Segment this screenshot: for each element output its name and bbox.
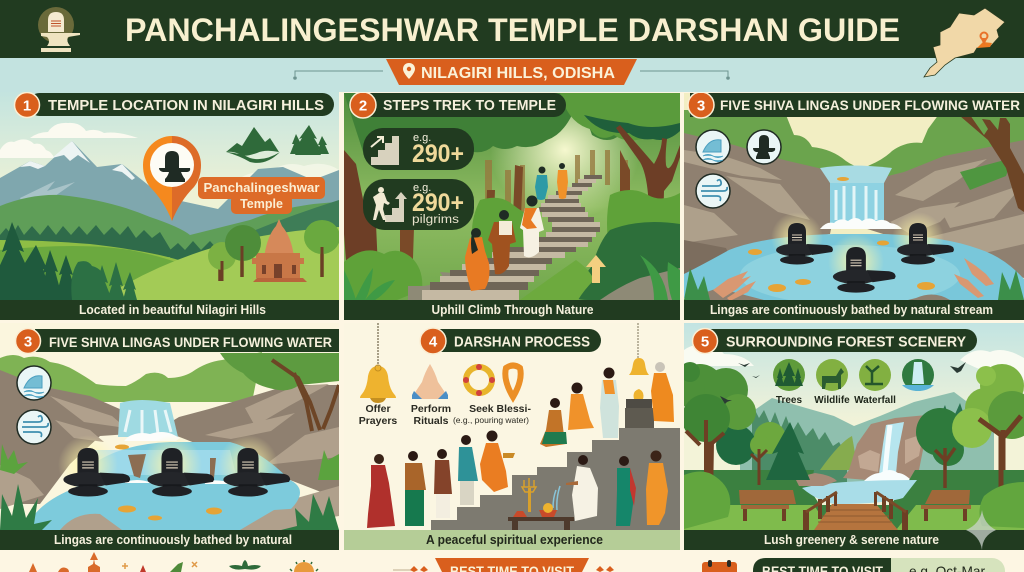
- hands: [713, 258, 994, 301]
- caption: [0, 530, 339, 550]
- heading: 3: [697, 98, 705, 114]
- caption: Lush greenery & serene nature: [764, 533, 939, 547]
- heading: FIVE SHIVA LINGAS UNDER FLOWING WATER: [49, 334, 332, 350]
- stat: steps: [363, 128, 474, 170]
- distant trunks: [485, 150, 628, 212]
- heading: FIVE SHIVA LINGAS UNDER FLOWING WATER: [720, 97, 1020, 113]
- heading: [350, 92, 566, 118]
- panel: five lingas bottom: [0, 323, 339, 550]
- caption: [344, 300, 680, 320]
- heading: TEMPLE LOCATION IN NILAGIRI HILLS: [48, 98, 324, 114]
- offering table: [508, 478, 574, 530]
- ground: [684, 470, 1024, 550]
- panel: darshan process: [344, 323, 680, 550]
- panel: forest scenery: [676, 323, 1024, 550]
- foliage: [0, 352, 262, 402]
- process labels: [359, 403, 531, 427]
- footer decorations: [29, 552, 413, 572]
- process labels: Perform: [411, 403, 451, 415]
- heading: [688, 92, 1024, 118]
- sparkle: [966, 510, 996, 550]
- mountains: [0, 141, 339, 235]
- heading: STEPS TREK TO TEMPLE: [383, 98, 556, 114]
- evergreen trees: [0, 222, 79, 300]
- process labels: Rituals: [413, 415, 449, 427]
- bushes: [344, 190, 680, 302]
- lingas: [58, 435, 290, 497]
- round trees: [218, 254, 324, 281]
- tree trunks: [344, 125, 680, 260]
- foliage: [684, 110, 1024, 176]
- benches: [739, 490, 971, 521]
- caption: Uphill Climb Through Nature: [432, 303, 594, 317]
- scenery labels: Waterfall: [854, 395, 896, 406]
- icons: [17, 366, 51, 444]
- process labels: Offer: [365, 403, 391, 415]
- grey rocks: [408, 268, 680, 300]
- panel: temple location: [0, 92, 340, 322]
- heading: 2: [359, 98, 367, 114]
- icons: [696, 130, 781, 208]
- pilgrims: [367, 362, 674, 528]
- meadow: [0, 240, 178, 262]
- process labels: Prayers: [359, 415, 397, 427]
- coins: [748, 249, 762, 255]
- best time pill: [753, 558, 1005, 572]
- header band: [0, 0, 1024, 92]
- caption: Lingas are continuously bathed by natural: [54, 533, 292, 547]
- heading: DARSHAN PROCESS: [454, 334, 590, 350]
- label: temple: Temple: [240, 197, 283, 211]
- panel: five lingas top: [684, 92, 1024, 320]
- caption: Located in beautiful Nilagiri Hills: [79, 303, 266, 317]
- process labels: (e.g., pouring water): [453, 415, 529, 425]
- heading: [420, 328, 601, 354]
- caption: [344, 530, 680, 550]
- best time banner: [410, 558, 614, 572]
- caption: [684, 530, 1024, 550]
- bird icons: [720, 362, 966, 404]
- water: [25, 442, 300, 530]
- stairs: [422, 175, 602, 300]
- heading: SURROUNDING FOREST SCENERY: [726, 334, 966, 350]
- pin: [143, 136, 201, 221]
- icon: mountains: [226, 127, 280, 163]
- stat: pilgrims: 290+: [412, 189, 464, 217]
- icon: praying hands: [412, 364, 448, 399]
- heading: [14, 92, 334, 118]
- far hills: [0, 194, 331, 258]
- heading: 5: [701, 334, 709, 350]
- lake: [802, 480, 917, 504]
- scenery labels: Trees: [776, 395, 803, 406]
- stat: pilgrims: [363, 179, 474, 230]
- foliage: [344, 93, 617, 153]
- location banner: [293, 59, 730, 85]
- stat: steps: 290+: [412, 140, 464, 168]
- lingas: [771, 212, 954, 293]
- scenery icons: [773, 359, 934, 391]
- panel: steps trek: [344, 80, 680, 320]
- caption: [684, 300, 1024, 320]
- caption: Lingas are continuously bathed by natural stream: [710, 303, 993, 317]
- cliff and waterfall: [843, 415, 927, 480]
- temple: [252, 219, 307, 282]
- stat: pilgrims: pilgrims: [412, 214, 459, 226]
- trees: [676, 362, 1024, 529]
- heading: [16, 328, 339, 354]
- icon: garlands: [463, 364, 521, 397]
- stat: pilgrims: e.g.: [413, 182, 431, 194]
- water: [684, 234, 1024, 300]
- leaves: [344, 255, 680, 300]
- bell left: [360, 323, 396, 403]
- stairs: [431, 428, 680, 530]
- rocks: [684, 133, 1024, 278]
- heading: 4: [429, 334, 438, 350]
- foreground: [60, 506, 334, 530]
- arrow: [586, 255, 606, 283]
- icon: calendar: [702, 560, 737, 572]
- scenery labels: Wildlife: [814, 395, 850, 406]
- heading: 1: [23, 98, 31, 114]
- caption: [0, 300, 339, 320]
- altar: [625, 389, 654, 428]
- caption: A peaceful spiritual experience: [426, 533, 603, 547]
- bell right: [629, 323, 649, 375]
- label: temple: [198, 177, 325, 214]
- process labels: Seek Blessi-: [469, 403, 531, 415]
- tree: [220, 353, 339, 431]
- rocks: [0, 370, 339, 504]
- boardwalk: [803, 492, 908, 530]
- coins: [115, 444, 129, 450]
- tree: [960, 115, 1024, 212]
- stat: steps: e.g.: [413, 132, 431, 144]
- heading: [692, 328, 977, 354]
- scenery labels: [776, 395, 896, 406]
- title: PANCHALINGESHWAR TEMPLE DARSHAN GUIDE: [125, 12, 900, 48]
- clouds: [0, 123, 138, 158]
- location banner: NILAGIRI HILLS, ODISHA: [421, 65, 615, 82]
- heading: 3: [24, 334, 32, 350]
- icon: Odisha map: [924, 8, 1005, 77]
- icon: shiva linga: [38, 7, 80, 52]
- icon: pine trees: [290, 125, 329, 155]
- bottom rocks: [708, 290, 950, 300]
- hills: [740, 392, 994, 482]
- pilgrims: [465, 163, 568, 291]
- label: temple: Panchalingeshwar: [204, 181, 320, 195]
